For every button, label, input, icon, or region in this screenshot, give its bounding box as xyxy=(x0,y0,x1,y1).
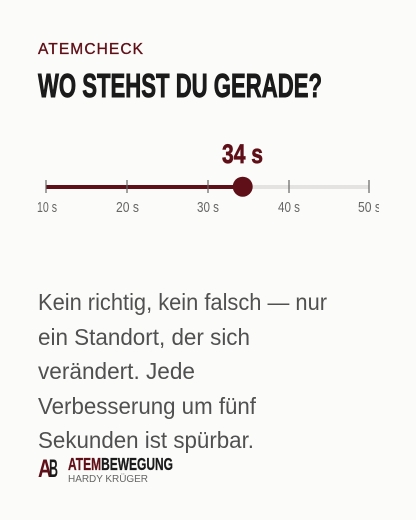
body text: Kein richtig, kein falsch — nur xyxy=(38,289,327,315)
axis labels: 50 s xyxy=(358,200,381,216)
icon: AB monogram: A xyxy=(38,455,52,483)
eyebrow heading: ATEMCHECK xyxy=(38,41,144,58)
axis labels: 30 s xyxy=(197,200,219,216)
axis labels: 10 s xyxy=(37,200,57,216)
brand name: ATEMBEWEGUNG xyxy=(68,454,173,474)
brand logo xyxy=(38,454,173,485)
body text xyxy=(38,289,327,453)
slider track xyxy=(46,185,369,189)
axis labels xyxy=(38,202,379,212)
infographic canvas xyxy=(38,42,379,482)
body text: Verbesserung um fünf xyxy=(38,393,256,419)
axis labels: 20 s xyxy=(116,200,139,216)
axis labels: 40 s xyxy=(278,200,300,216)
author name: HARDY KRÜGER xyxy=(68,473,148,485)
body text: verändert. Jede xyxy=(38,358,195,384)
tick marks xyxy=(46,180,369,193)
brand logo: B xyxy=(49,455,58,483)
slider progress xyxy=(46,185,243,189)
slider chart xyxy=(38,144,379,212)
slider knob xyxy=(233,177,253,197)
body text: ein Standort, der sich xyxy=(38,324,250,350)
current value label: 34 s xyxy=(222,139,263,169)
body text: Sekunden ist spürbar. xyxy=(38,427,254,453)
